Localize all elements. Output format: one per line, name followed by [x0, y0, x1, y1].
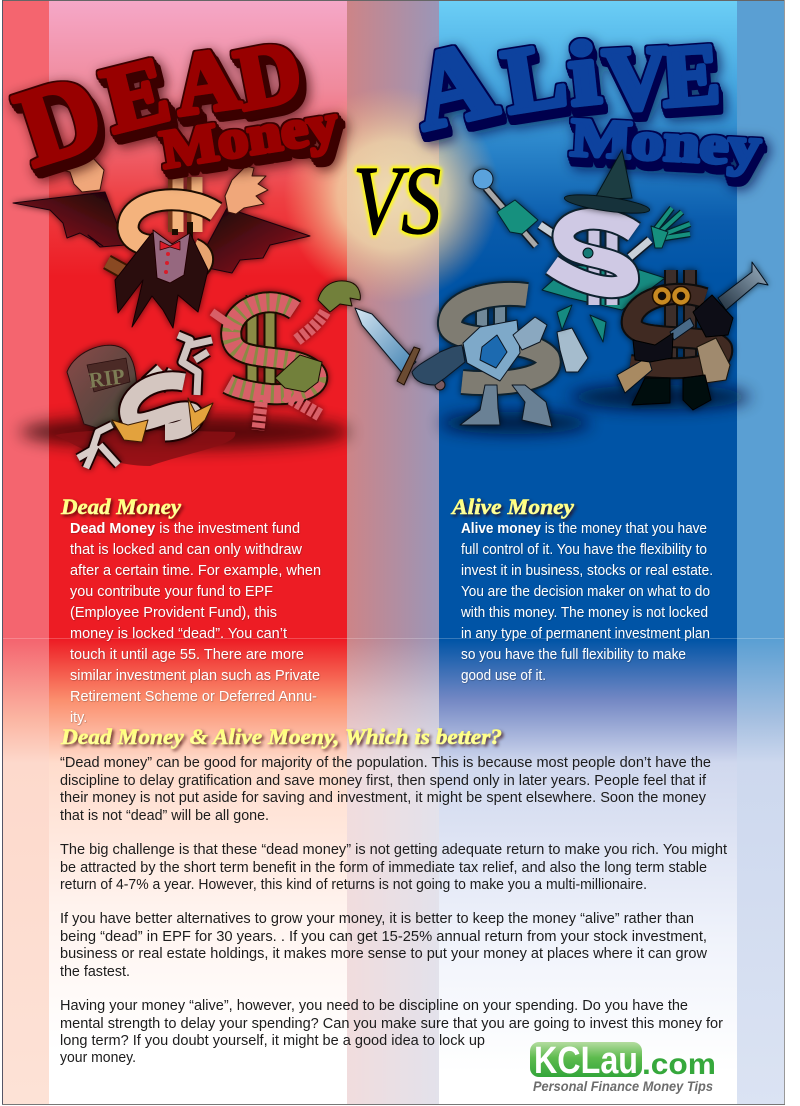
icon: ammo pouch [697, 338, 730, 383]
title: Dead Money: D [228, 22, 309, 130]
icon: black boots [632, 375, 711, 410]
text block: Dead Money description [70, 521, 321, 726]
text block: Alive Money description: full control of it. You have the flexibility to [461, 542, 707, 558]
text block: Dead Money description: ity. [70, 710, 87, 726]
text block: Dead Money description: touch it until age 55. There are more [70, 647, 304, 663]
icon: sword [355, 308, 445, 390]
logo: KCLau.com: Personal Finance Money Tips [533, 1078, 713, 1094]
title: Alive Money: V [601, 28, 671, 130]
text block: paragraph 3: the fastest. [60, 964, 130, 980]
title: VS: VS [353, 147, 441, 255]
icon: rifle stock [617, 357, 652, 393]
icon: left bat wing [13, 192, 125, 247]
text block: paragraph 1: discipline to delay gratification and save money first, then spend only in later years. People feel that if [60, 773, 706, 789]
logo: KCLau.com: .com [642, 1048, 716, 1081]
icon: right hand [225, 166, 268, 214]
icon: right green glove [651, 208, 690, 248]
title: Alive Money: A [401, 17, 506, 153]
icon: rifle barrel [670, 318, 694, 340]
tombstone [67, 345, 137, 432]
text block: Dead Money description: similar investment plan such as Private [70, 668, 320, 684]
text block: paragraph 4: mental strength to delay your spending? Can you make sure that you are going to invest this money for [60, 1016, 723, 1032]
text block: Alive Money description: good use of it. [461, 668, 546, 684]
text block: paragraph 1: their money is not put aside for saving and investment, it might be spent elsewhere. Soon the money [60, 790, 707, 806]
text block: Dead Money description: Dead Money is the investment fund [70, 521, 300, 537]
ground shadows [20, 385, 750, 449]
icon: zombie second hand [275, 355, 322, 392]
text block: Alive Money description: with this money. The money is not locked [460, 605, 708, 621]
text block: paragraph 3 [60, 911, 708, 980]
title: Dead Money: E [93, 37, 179, 153]
icon: zombie arm and claw [297, 310, 326, 340]
text block: paragraph 3: If you have better alternatives to grow your money, it is better to keep the money “alive” rather than [60, 911, 694, 927]
text block: paragraph 2: return of 4-7% a year. However, this kind of returns is not going to make you a multi-millionaire. [60, 877, 647, 893]
text block: paragraph 2 [60, 842, 727, 893]
text block: paragraph 2: The big challenge is that these “dead money” is not getting adequate return to make you rich. You might [60, 842, 727, 858]
illustration: wizard dollar [473, 169, 690, 342]
ground mound [55, 430, 235, 466]
text block: Dead Money description: (Employee Provident Fund), this [70, 605, 277, 621]
icon: cape [115, 233, 208, 328]
text block: paragraph 2: be attracted by the short term benefit in the form of immediate tax relief, and also the long term stable [60, 860, 707, 876]
title: Alive Money [401, 17, 762, 177]
heading: Alive Money: Alive Money [450, 494, 574, 519]
text block: Dead Money description: you contribute your fund to EPF [70, 584, 273, 600]
icon: zombie legs [258, 395, 320, 430]
tombstone: RIP [87, 363, 126, 393]
text block: paragraph 4: your money. [60, 1050, 136, 1066]
illustration: hunter dollar with blunderbuss [617, 262, 768, 410]
text block: Alive Money description: in any type of permanent investment plan [461, 626, 710, 642]
icon: shoulder plate [513, 317, 547, 350]
text block: Dead Money description: Retirement Scheme or Deferred Annu- [70, 689, 317, 705]
icon: right arm armor [557, 328, 588, 372]
heading: Dead Money: Dead Money [60, 494, 181, 519]
icon: goggle eyes [652, 286, 690, 306]
text block: paragraph 1: “Dead money” can be good for majority of the population. This is because most people don’t have the [60, 755, 711, 771]
icon: teal feet [557, 305, 606, 342]
text block: Alive Money description: invest it in business, stocks or real estate. [461, 563, 713, 579]
illustration: vampire dollar [13, 157, 310, 328]
icon: dollar body [107, 177, 216, 272]
icon: staff [486, 188, 536, 246]
icon: vest [153, 230, 190, 283]
icon: left green glove [497, 200, 538, 234]
logo: KCLau.com [530, 1040, 716, 1094]
icon: cape [542, 265, 665, 310]
title: VS: VS [353, 147, 441, 255]
icon: lower skeletal hand [78, 425, 118, 468]
logo: KCLau.com: KCLau [534, 1040, 638, 1082]
title: Alive Money: i [564, 23, 604, 125]
text block: Alive Money description [460, 521, 713, 684]
text block: paragraph 4 [60, 998, 723, 1066]
title: Dead Money: Money [156, 93, 342, 180]
illustration: knight dollar with sword [355, 283, 588, 427]
title: Dead Money [3, 22, 342, 190]
text block: paragraph 1 [60, 755, 711, 824]
icon: left arm and gauntlet [412, 345, 465, 385]
title: Alive Money: Money [569, 107, 762, 177]
text block: Alive Money description: Alive money is the money that you have [461, 521, 707, 537]
text block: paragraph 1: that is not “dead” will be all gone. [60, 808, 269, 824]
text block: paragraph 4: Having your money “alive”, however, you need to be discipline on your spending. Do you have the [60, 998, 688, 1014]
icon: bow tie [160, 241, 180, 250]
title: Dead Money: A [168, 30, 245, 135]
icon: breastplate [463, 320, 520, 381]
illustration: bandaged zombie dollar [212, 281, 360, 430]
icon: vest buttons [164, 252, 170, 274]
text block: paragraph 4: long term? If you doubt yourself, it might be a good idea to lock up [60, 1033, 485, 1049]
icon: torn gold shards [112, 398, 213, 442]
icon: wizard hat [563, 150, 651, 217]
icon: left hand [62, 157, 104, 192]
illustration: shattered skeleton dollar [78, 335, 213, 468]
text block: Dead Money description: after a certain time. For example, when [70, 563, 321, 579]
heading: which is better: Dead Money & Alive Moeny, Which is better? [60, 724, 502, 749]
icon: arms [540, 225, 650, 257]
text block: Dead Money description: money is locked “dead”. You can’t [70, 626, 287, 642]
text block: paragraph 3: business or real estate holdings, it makes more sense to put your money at places where it can grow [60, 946, 708, 962]
icon: right bat wing [203, 208, 310, 273]
icon: black bow tie and gloves [633, 295, 733, 362]
icon: blunderbuss horn [718, 262, 768, 310]
text block: Alive Money description: You are the decision maker on what to do [461, 584, 710, 600]
text block: paragraph 3: being “dead” in EPF for 30 years. . If you can get 15-25% annual return from your stock investment, [60, 929, 707, 945]
text block: Dead Money description: that is locked and can only withdraw [70, 542, 303, 558]
icon: legs and boots [460, 385, 552, 427]
title: Dead Money: D [3, 49, 116, 190]
text block: Alive Money description: so you have the full flexibility to make [461, 647, 686, 663]
icon: raised skeletal hand [178, 335, 212, 395]
title: Alive Money: L [496, 22, 573, 133]
title: Alive Money: E [659, 25, 723, 125]
